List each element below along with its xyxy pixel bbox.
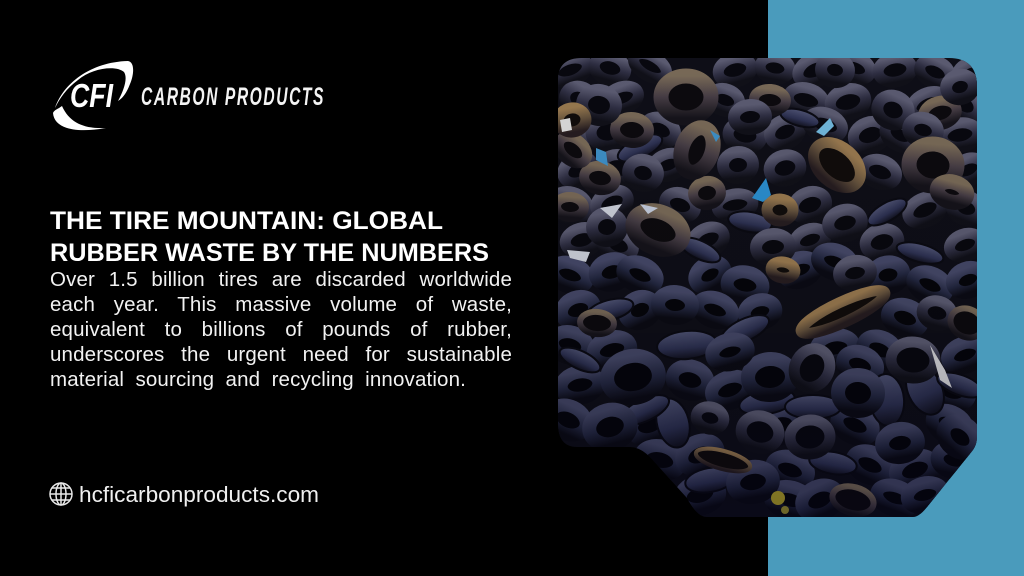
litter and plastic scraps	[560, 118, 952, 514]
icon: globe	[50, 483, 72, 505]
website link with globe icon	[49, 482, 319, 507]
website address: hcficarbonproducts.com	[79, 482, 319, 507]
heading	[50, 207, 489, 266]
long tread tire	[797, 283, 889, 341]
side-on tire bands	[556, 105, 986, 496]
logo: CFI Carbon Products	[53, 61, 325, 130]
heading: THE TIRE MOUNTAIN: GLOBAL	[50, 207, 443, 235]
body paragraph	[50, 268, 512, 391]
body paragraph: underscores the urgent need for sustainable	[50, 343, 512, 366]
bulk layer	[558, 58, 977, 260]
blue side panel	[768, 0, 1024, 576]
lit tires in the upper half	[554, 88, 960, 218]
tan side-on tire	[694, 446, 752, 474]
body paragraph: Over 1.5 billion tires are discarded worldwide	[50, 268, 512, 291]
logo swoosh	[53, 61, 133, 130]
dark tires in the lower half	[585, 291, 983, 500]
body paragraph: each year. This massive volume of waste,	[50, 293, 512, 316]
body paragraph: equivalent to billions of pounds of rubber,	[50, 318, 512, 341]
body paragraph: material sourcing and recycling innovation.	[50, 368, 466, 391]
logo initials: CFI	[70, 77, 114, 114]
photo: pile of discarded tires	[558, 58, 977, 517]
